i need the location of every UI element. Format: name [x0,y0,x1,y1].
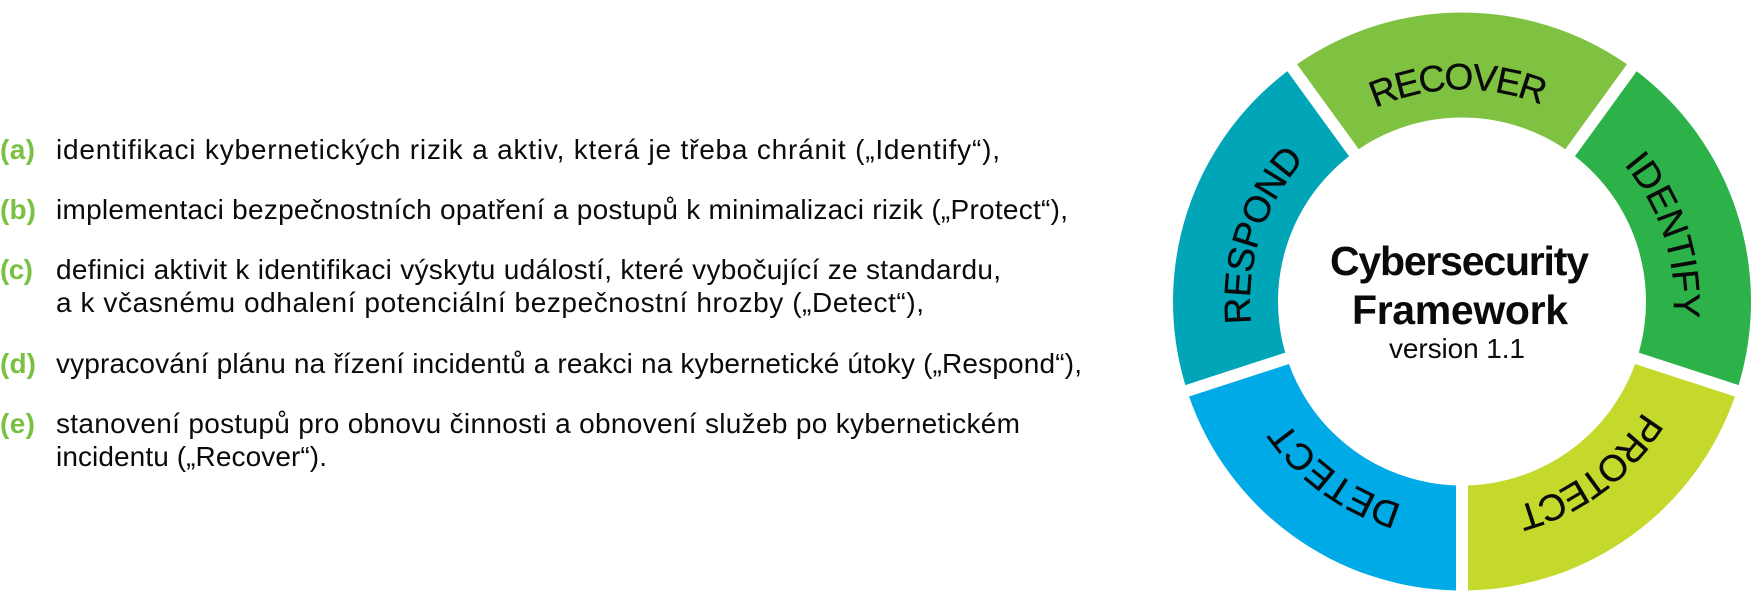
segment: protect [1468,364,1735,590]
item c: (c) [0,254,33,285]
item c: a k včasnému odhalení potenciální bezpečnostní hrozby („Detect“), [56,287,924,318]
heading: Cybersecurity [1330,238,1589,284]
label: recover: RECOVER [1368,64,1546,107]
item e: (e) [0,408,35,439]
item a: (a) [0,134,35,165]
segment: respond [1173,71,1349,385]
item a: identifikaci kybernetických rizik a aktiv, která je třeba chránit („Identify“), [56,134,1000,165]
heading line two: Framework [1352,287,1568,333]
center title [1330,238,1589,364]
item e [0,408,1020,472]
item b: (b) [0,194,36,225]
label: protect: PROTECT [1523,414,1663,532]
version: version 1.1 [1389,333,1525,364]
label: identify: IDENTIFY [1626,150,1700,318]
ring diagram [1173,12,1751,590]
item b: implementaci bezpečnostních opatření a postupů k minimalizaci rizik („Protect“), [56,194,1068,225]
item c: definici aktivit k identifikaci výskytu událostí, které vybočující ze standardu, [56,254,1001,285]
segment: identify [1575,71,1751,385]
list of framework functions [0,134,1082,472]
item c [0,254,1001,318]
item e: incidentu („Recover“). [56,441,327,472]
segment: detect [1189,364,1456,590]
item d: vypracování plánu na řízení incidentů a reakci na kybernetické útoky („Respond“), [56,348,1082,379]
label: respond: RESPOND [1224,148,1299,322]
segment: recover [1297,13,1627,149]
item e: stanovení postupů pro obnovu činnosti a obnovení služeb po kybernetickém [56,408,1020,439]
label: detect: DETECT [1266,428,1400,528]
item d: (d) [0,348,36,379]
